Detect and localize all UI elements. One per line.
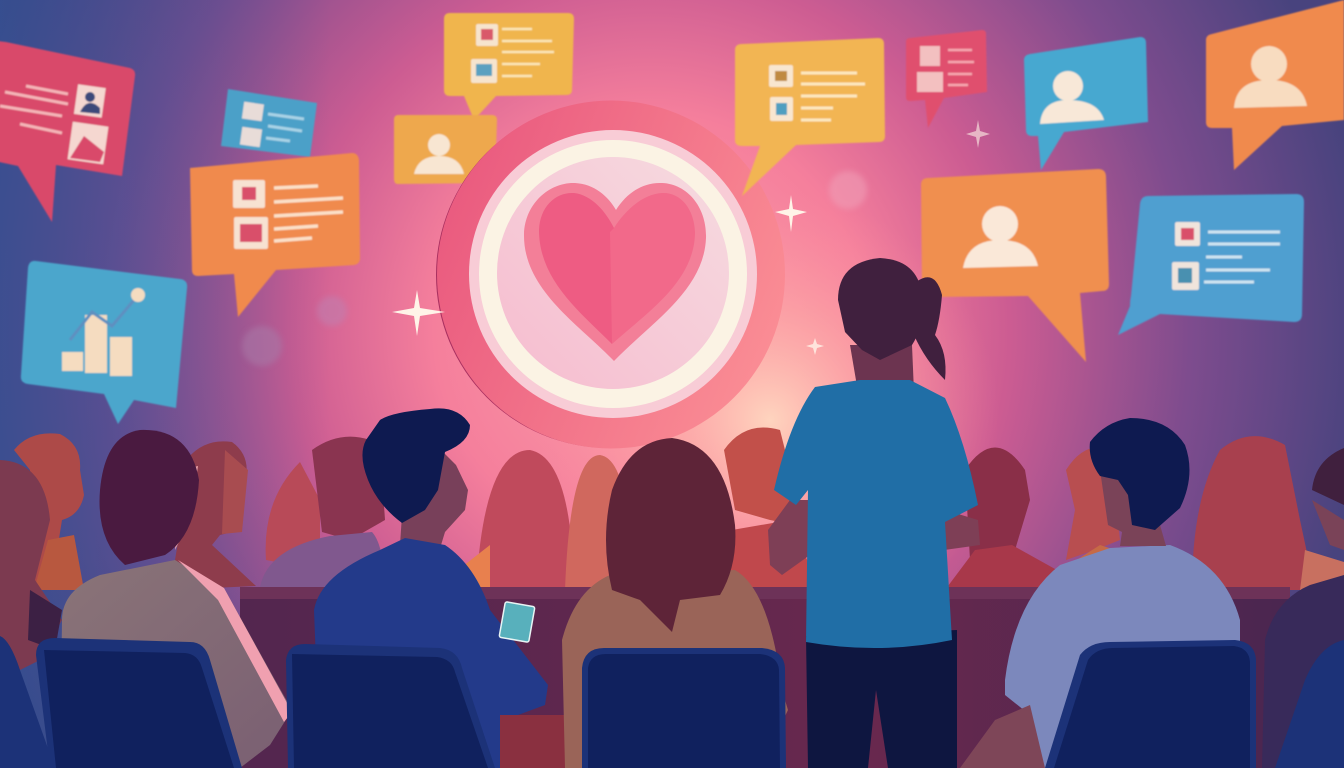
person: back long hair — [266, 462, 320, 570]
person: back right profile — [1064, 448, 1190, 590]
bubble: blue person top — [1024, 37, 1148, 170]
person: back left — [170, 441, 256, 590]
seat: right — [1045, 640, 1256, 768]
person: woman centre — [562, 438, 788, 768]
smoke puffs — [242, 171, 867, 366]
bubble: orange person centre right — [921, 169, 1109, 362]
person: back right long hair — [1192, 436, 1315, 590]
bubble: red top-left — [0, 40, 135, 222]
bubble: small red — [906, 30, 987, 128]
seat: middle-left — [286, 644, 495, 768]
bubble: small blue — [221, 89, 317, 157]
icon: phone — [499, 602, 535, 642]
back wall — [240, 587, 1290, 768]
icon: heart — [524, 183, 706, 361]
seat: far left — [0, 636, 55, 768]
person: woman left — [60, 430, 292, 768]
seat: centre — [582, 648, 786, 768]
bubble: orange left — [190, 153, 360, 317]
person: far left long hair — [0, 460, 62, 680]
seat: far right — [1275, 640, 1344, 768]
background audience — [14, 428, 1344, 605]
person: back far left — [14, 433, 84, 590]
person: standing woman — [768, 258, 980, 768]
bubble: yellow right of heart — [735, 38, 885, 196]
seat: left — [36, 638, 242, 768]
bubble: blue right — [1118, 194, 1304, 335]
person: far right — [1262, 448, 1344, 768]
person: man right — [960, 418, 1240, 768]
bubble: orange person top right — [1206, 0, 1344, 170]
heart badge — [436, 100, 785, 448]
sparkles — [392, 120, 990, 355]
person: back man centre — [724, 428, 820, 590]
bubble: yellow person — [394, 115, 497, 184]
person: back long hair centre — [476, 450, 574, 590]
person: back braid — [945, 448, 1064, 605]
icon: bar chart — [62, 288, 145, 376]
bubble: blue chart — [21, 261, 187, 424]
bubble: yellow top — [444, 13, 574, 120]
person: man with phone — [314, 408, 548, 768]
person: back man — [260, 437, 385, 590]
